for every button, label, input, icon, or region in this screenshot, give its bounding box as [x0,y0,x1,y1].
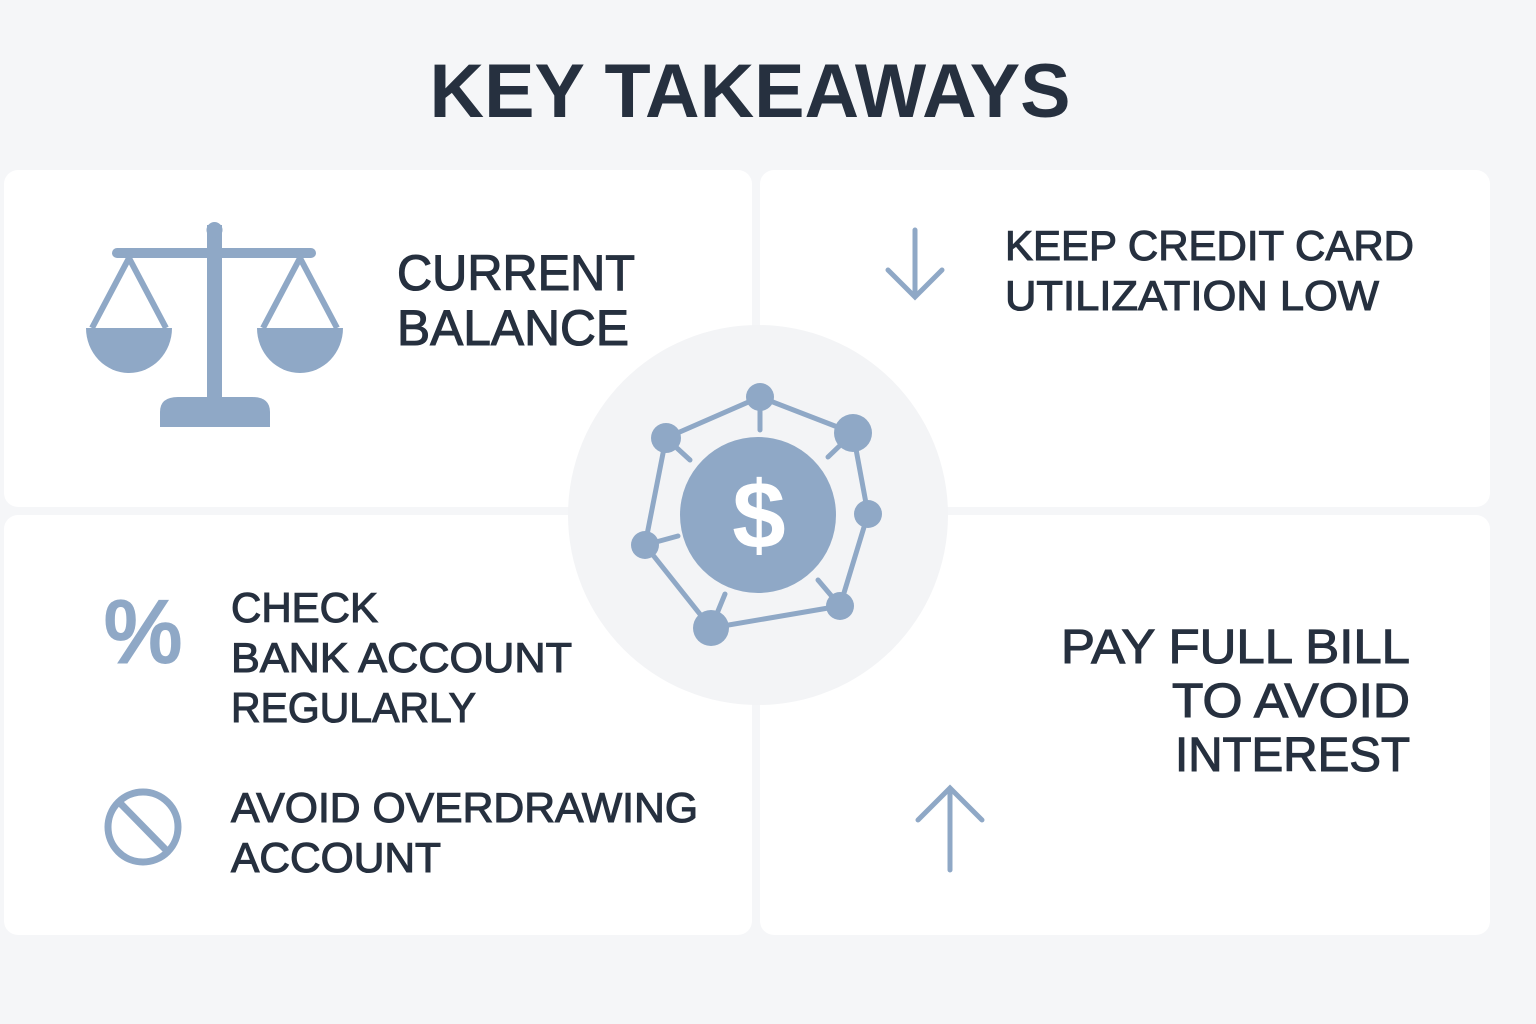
text: credit utilization: KEEP CREDIT CARD [1005,222,1414,269]
center circle: $ [732,462,786,569]
text: check bank account [231,584,572,731]
text: avoid overdrawing: ACCOUNT [231,834,441,881]
text: current balance [397,245,635,356]
text: check bank account: BANK ACCOUNT [231,634,572,681]
panel: current balance [4,170,752,507]
text: check bank account: CHECK [231,584,378,631]
panel: pay full bill [760,515,1490,935]
icon: scale [86,222,343,427]
text: credit utilization [1005,222,1414,319]
icon: up arrow [918,788,982,870]
text: avoid overdrawing [231,784,698,881]
title: KEY TAKEAWAYS [430,49,1070,134]
text: current balance: BALANCE [397,300,629,356]
icon: down arrow [888,230,942,297]
text: pay full bill: PAY FULL BILL [1061,621,1410,674]
text: pay full bill [1061,621,1410,782]
icon: dollar network [631,383,882,646]
text: avoid overdrawing: AVOID OVERDRAWING [231,784,698,831]
text: pay full bill: TO AVOID [1172,675,1410,728]
text: pay full bill: INTEREST [1175,729,1410,782]
icon: ban [108,792,178,862]
text: check bank account: REGULARLY [231,684,476,731]
panel: bank account [4,515,752,935]
icon: percent: % [104,582,182,681]
panel: credit utilization [760,170,1490,507]
text: credit utilization: UTILIZATION LOW [1005,272,1379,319]
center circle [568,325,948,705]
text: current balance: CURRENT [397,245,635,301]
